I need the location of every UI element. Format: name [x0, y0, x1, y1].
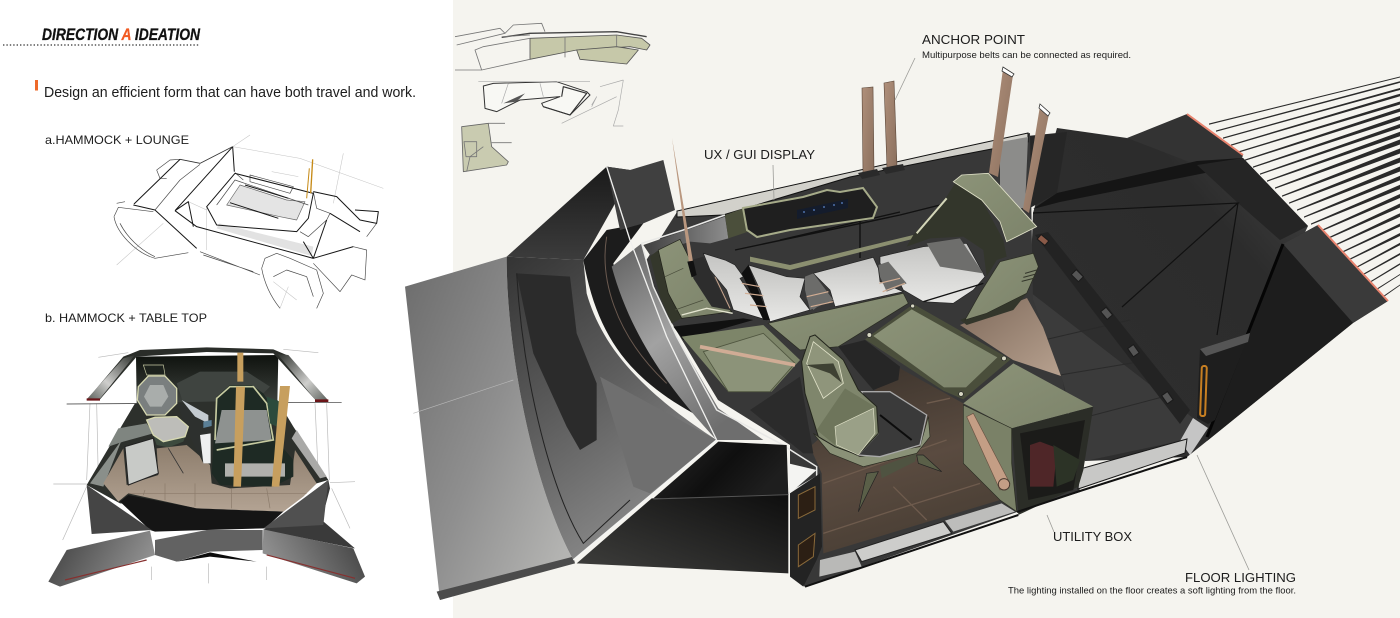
rear seat lower: [960, 253, 1038, 325]
center dark bumper: [120, 495, 283, 532]
callout: anchor point: ANCHOR POINT: [922, 33, 1025, 47]
rear seat support: [907, 183, 1007, 277]
white crease line: [607, 167, 717, 440]
chair ring: [813, 417, 930, 467]
back belts: [858, 81, 905, 179]
dark inner band: [583, 223, 717, 420]
fender dark recess: [517, 273, 597, 450]
main floor and rail: [805, 368, 1018, 587]
fender panel: [507, 257, 717, 560]
callout: anchor point: [922, 33, 1131, 60]
cabin back wall: [640, 133, 1080, 587]
front corner with vents: [790, 473, 822, 587]
utility box and chair: [802, 335, 1093, 515]
background: cream panel: [453, 0, 1400, 618]
rim white edge: [642, 215, 817, 493]
chair tray: [858, 392, 927, 457]
cabin front parts: [643, 138, 832, 392]
hammock right fabric: [805, 238, 985, 310]
left seat: [153, 428, 188, 447]
callout: floor lighting: FLOOR LIGHTING: [1185, 571, 1296, 585]
callout: anchor point: Multipurpose belts can be connected as required.: [922, 50, 1131, 60]
leader: ux gui display: [773, 165, 774, 200]
thumbnail sketch 1: lounge seat: [455, 23, 650, 70]
light gray rim surface: [612, 243, 763, 440]
callout: floor lighting: [1008, 571, 1296, 596]
right hammock seat: [212, 385, 293, 487]
leader: floor lighting: [1197, 455, 1249, 570]
front fins: [87, 485, 152, 534]
tan side floor: [960, 298, 1061, 376]
right tall belts: [989, 67, 1050, 213]
speed stripes behind vehicle: [1209, 76, 1400, 297]
tan floor: [103, 445, 317, 512]
console rail: [750, 235, 915, 270]
rear side unit with orange light: [1180, 333, 1250, 455]
sketch b: rear view render with hammock and table top: [48, 347, 365, 587]
wall gray panel: [643, 217, 728, 255]
belts: [233, 353, 290, 487]
vehicle: main concept render: [405, 67, 1388, 600]
left table panel: [682, 325, 800, 392]
thumbnail sketch 2: line drawing of seat: [478, 80, 623, 126]
anchor rail with fittings: [1035, 232, 1190, 424]
bar frame: [865, 304, 1011, 399]
bolts: [867, 304, 1006, 396]
center storage box: [177, 402, 210, 463]
under bar shadow: [838, 340, 900, 390]
top dark wedge: [507, 167, 630, 260]
cube: [108, 423, 153, 447]
rail right of box: [1078, 439, 1187, 489]
display console: [743, 188, 877, 237]
title: DIRECTION A IDEATION: [42, 25, 201, 44]
label: a hammock + lounge: a.HAMMOCK + LOUNGE: [45, 133, 189, 147]
utility box: [963, 363, 1093, 515]
top light strip: [677, 133, 1028, 217]
rear body: dark panels: [1027, 114, 1308, 461]
wall lines: [735, 190, 1000, 258]
callout: utility box: UTILITY BOX: [1053, 530, 1133, 544]
under table dark: [750, 377, 813, 453]
label: b hammock + table top: b. HAMMOCK + TABLE TOP: [45, 311, 207, 325]
hammock fabric: [703, 253, 832, 322]
rail segments: [819, 552, 862, 577]
floor: [810, 368, 1000, 553]
rear fin with red lamp: [1187, 114, 1388, 441]
olive console side: [725, 208, 748, 238]
callout: ux gui display: UX / GUI DISPLAY: [704, 148, 816, 162]
leader: utility box: [1047, 515, 1054, 532]
left seat: [650, 239, 733, 323]
lower dark wedge lower: [577, 494, 788, 573]
table top: [768, 293, 908, 350]
left wing panel: [405, 257, 573, 600]
rear wall gray panel: [1000, 137, 1028, 209]
arches: [87, 347, 328, 401]
rear cabin, table and seats: [750, 173, 1038, 399]
construction lines: [53, 349, 355, 583]
lower dark wedge upper: [653, 442, 788, 498]
orange bullet mark: [35, 80, 38, 90]
cabin walls: [87, 400, 328, 512]
thumbnail sketch 3: cup seat: [462, 123, 512, 172]
callout: floor lighting: The lighting installed on the floor creates a soft lighting from the floor.: [1008, 586, 1296, 596]
rear seat upper: [953, 173, 1037, 242]
intro sentence: Design an efficient form that can have both travel and work.: [44, 85, 416, 101]
back wall: [136, 355, 278, 403]
sketch a: line drawing of vehicle: [114, 135, 383, 308]
lower wings: [155, 530, 263, 562]
leader: anchor point: [895, 58, 915, 100]
slots under seat: [673, 318, 753, 340]
chair legs: [858, 455, 942, 512]
left belt: [672, 138, 695, 273]
bar top: [873, 309, 997, 387]
lower body edge: [1017, 457, 1187, 512]
chair strap: [880, 453, 917, 478]
chair back: [802, 335, 878, 455]
left wing and fender assembly: [405, 160, 822, 600]
